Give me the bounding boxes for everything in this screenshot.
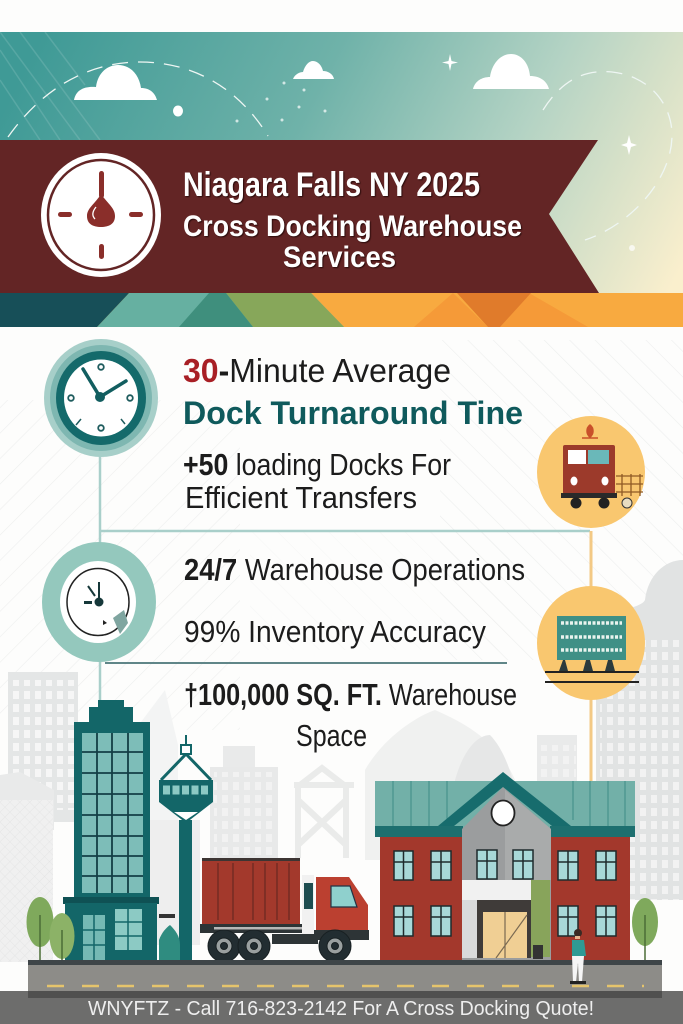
heading: title line 2: Cross Docking Warehouse <box>183 210 522 243</box>
heading: title line 3: Services <box>283 241 396 274</box>
panel: footer call to action <box>0 991 683 1024</box>
stat: warehouse space: Space <box>296 718 367 753</box>
footer text: WNYFTZ - Call 716-823-2142 For A Cross Docking Quote! <box>88 998 594 1020</box>
heading: dock turnaround time: Dock Turnaround Tine <box>183 395 523 431</box>
icon: warehouse building <box>375 772 635 961</box>
background: diagonal line pattern <box>0 340 683 730</box>
stat: 24/7 operations: 24/7 Warehouse Operations <box>184 552 525 587</box>
icon: cloud right <box>473 54 549 89</box>
icon: sparkles and dots <box>173 54 637 251</box>
panel: geometric colour strip <box>0 293 683 327</box>
background: grey city skyline <box>0 560 683 962</box>
icon: person walking <box>570 929 586 984</box>
stat: loading docks: +50 loading Docks For <box>183 447 451 482</box>
stat: loading docks: Efficient Transfers <box>185 480 417 515</box>
icon: small teal tree <box>159 925 180 960</box>
warehouse windows <box>394 850 616 936</box>
icon: teal clock badge <box>44 339 158 457</box>
stat: loading docks <box>183 447 451 515</box>
stat: 30-minute average: 30-Minute Average <box>183 352 451 389</box>
panel: road <box>28 960 662 998</box>
icon: train badge <box>537 416 645 528</box>
icon: 24/7 clock badge <box>42 542 156 662</box>
icon: warehouse badge <box>537 586 645 700</box>
icon: dashed orbit arcs <box>8 62 672 240</box>
icon: left trees <box>26 897 74 960</box>
icon: cloud middle <box>293 61 334 79</box>
text block: dock turnaround <box>183 352 523 431</box>
connector lines <box>100 450 591 782</box>
stat: warehouse space: †100,000 SQ. FT. Warehouse <box>184 677 517 712</box>
panel: sky header <box>0 32 683 293</box>
truck wheels <box>208 930 351 962</box>
heading: title line 1: Niagara Falls NY 2025 <box>183 166 480 204</box>
stat: warehouse space <box>184 677 517 753</box>
background: ghost tower frame <box>294 768 354 858</box>
icon: teal office tower <box>63 700 159 961</box>
icon: cloud left <box>74 65 157 100</box>
stat: inventory accuracy: 99% Inventory Accuracy <box>184 614 486 649</box>
panel: maroon title ribbon <box>0 140 599 293</box>
icon: observation tower <box>159 735 213 961</box>
icon: right tree <box>632 898 658 960</box>
icon: delivery truck <box>200 858 369 962</box>
icon: title clock <box>41 153 161 277</box>
